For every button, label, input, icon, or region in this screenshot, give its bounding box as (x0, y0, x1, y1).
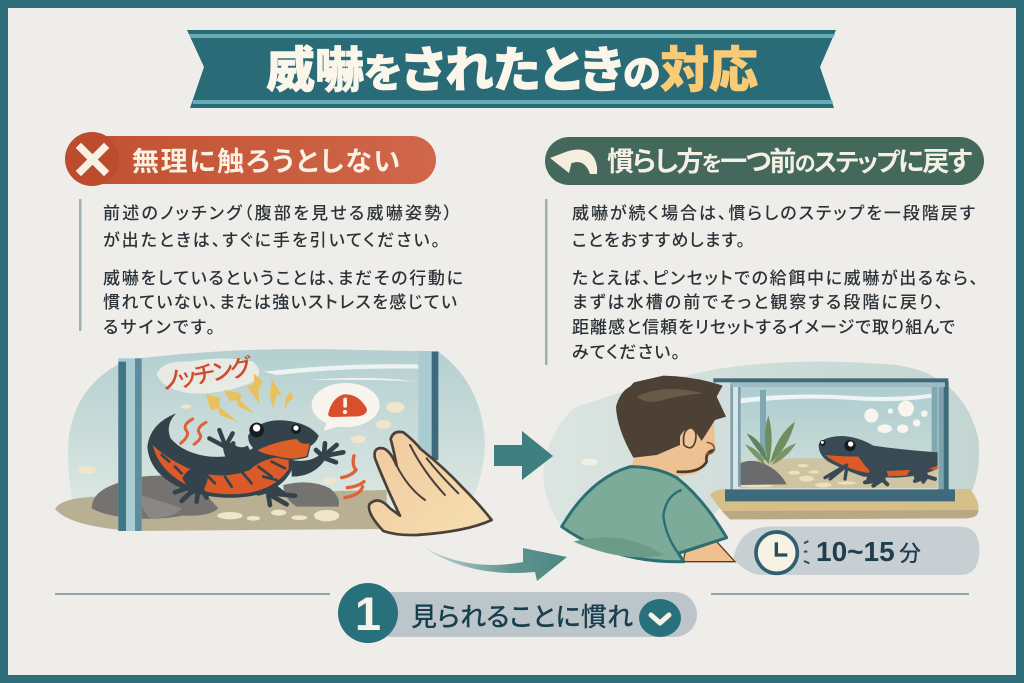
hind limb left (175, 470, 207, 502)
ground (55, 490, 387, 531)
eyes (249, 423, 264, 437)
text block: right body: 距離感と信頼をリセットするイメージで取り組んで (572, 318, 955, 337)
text block: right body (545, 199, 978, 365)
step number badge (338, 583, 398, 643)
time pill (733, 527, 979, 575)
plant (745, 416, 796, 465)
duration unit: 分 (899, 541, 921, 566)
newt: calm (819, 436, 938, 486)
icon: yellow threat bolts (206, 373, 294, 422)
gravel (740, 458, 938, 488)
t-shirt (562, 467, 727, 562)
text block: right body: みてください。 (572, 343, 680, 362)
rocks (92, 476, 339, 519)
neck and face (632, 420, 715, 477)
heading text right: 慣らし方を一つ前のステップに戻す (607, 147, 972, 177)
rock (740, 461, 787, 485)
speech bubble alert (312, 383, 380, 431)
title text: 威嚇をされたときの対応 (266, 44, 758, 98)
head (248, 420, 319, 453)
tank background (68, 349, 485, 505)
tank frame (732, 383, 739, 490)
step number badge: 1 (355, 587, 381, 640)
text block: right body: ことをおすすめします。 (572, 231, 745, 250)
icon: cross badge (65, 132, 119, 186)
ear (684, 428, 696, 448)
mouth (256, 438, 311, 459)
glasses (707, 442, 714, 454)
text block: right body: たとえば、ピンセットでの給餌中に威嚇が出るなら、 (572, 268, 978, 288)
icon: return arrow (550, 150, 597, 174)
icon: heat wiggles (181, 419, 364, 498)
shelf (710, 489, 979, 519)
arm (683, 542, 735, 562)
arrow: curved to step (425, 548, 567, 581)
tank (713, 378, 955, 501)
illustration: person watching tank (543, 362, 979, 575)
glass bars (118, 351, 438, 531)
arm left (209, 430, 249, 470)
illustration: threatening newt and hand (55, 349, 492, 535)
panel: do not touch heading (65, 132, 436, 186)
icon: chevron (639, 599, 681, 637)
text block: left body: 前述のノッチング（腹部を見せる威嚇姿勢） (103, 204, 452, 223)
beard line (677, 450, 714, 472)
panel: step back heading (545, 137, 984, 185)
step text: 見られることに慣れ (411, 602, 633, 632)
bubbles (864, 401, 928, 433)
label: notching: ノッチング (160, 353, 255, 395)
person (562, 376, 735, 562)
text block: right body: まずは水槽の前でそっと観察する段階に戻り、 (572, 293, 943, 312)
icon: clock (756, 532, 809, 573)
right divider (711, 593, 969, 595)
heading text left: 無理に触ろうとしない (132, 147, 400, 177)
step label (338, 583, 697, 643)
text block: left body (79, 199, 463, 337)
pebbles (79, 402, 405, 521)
icon: reaching hand (369, 432, 492, 535)
newt: threat pose (147, 413, 343, 505)
arm right (292, 443, 343, 465)
text block: left body: 慣れていない、または強いストレスを感じてい (103, 293, 457, 312)
hair (616, 376, 726, 458)
scene background (543, 362, 979, 562)
hind limb right (258, 488, 295, 505)
text block: left body: が出たときは、すぐに手を引いてください。 (103, 230, 440, 250)
title banner (187, 30, 836, 108)
arrow: to next step (494, 431, 553, 480)
text block: left body: るサインです。 (103, 318, 215, 337)
left divider (55, 593, 330, 595)
duration label: 10~15 (816, 536, 895, 567)
text block: left body: 威嚇をしているということは、まだその行動に (103, 269, 463, 288)
text block: right body: 威嚇が続く場合は、慣らしのステップを一段階戻す (572, 203, 975, 223)
